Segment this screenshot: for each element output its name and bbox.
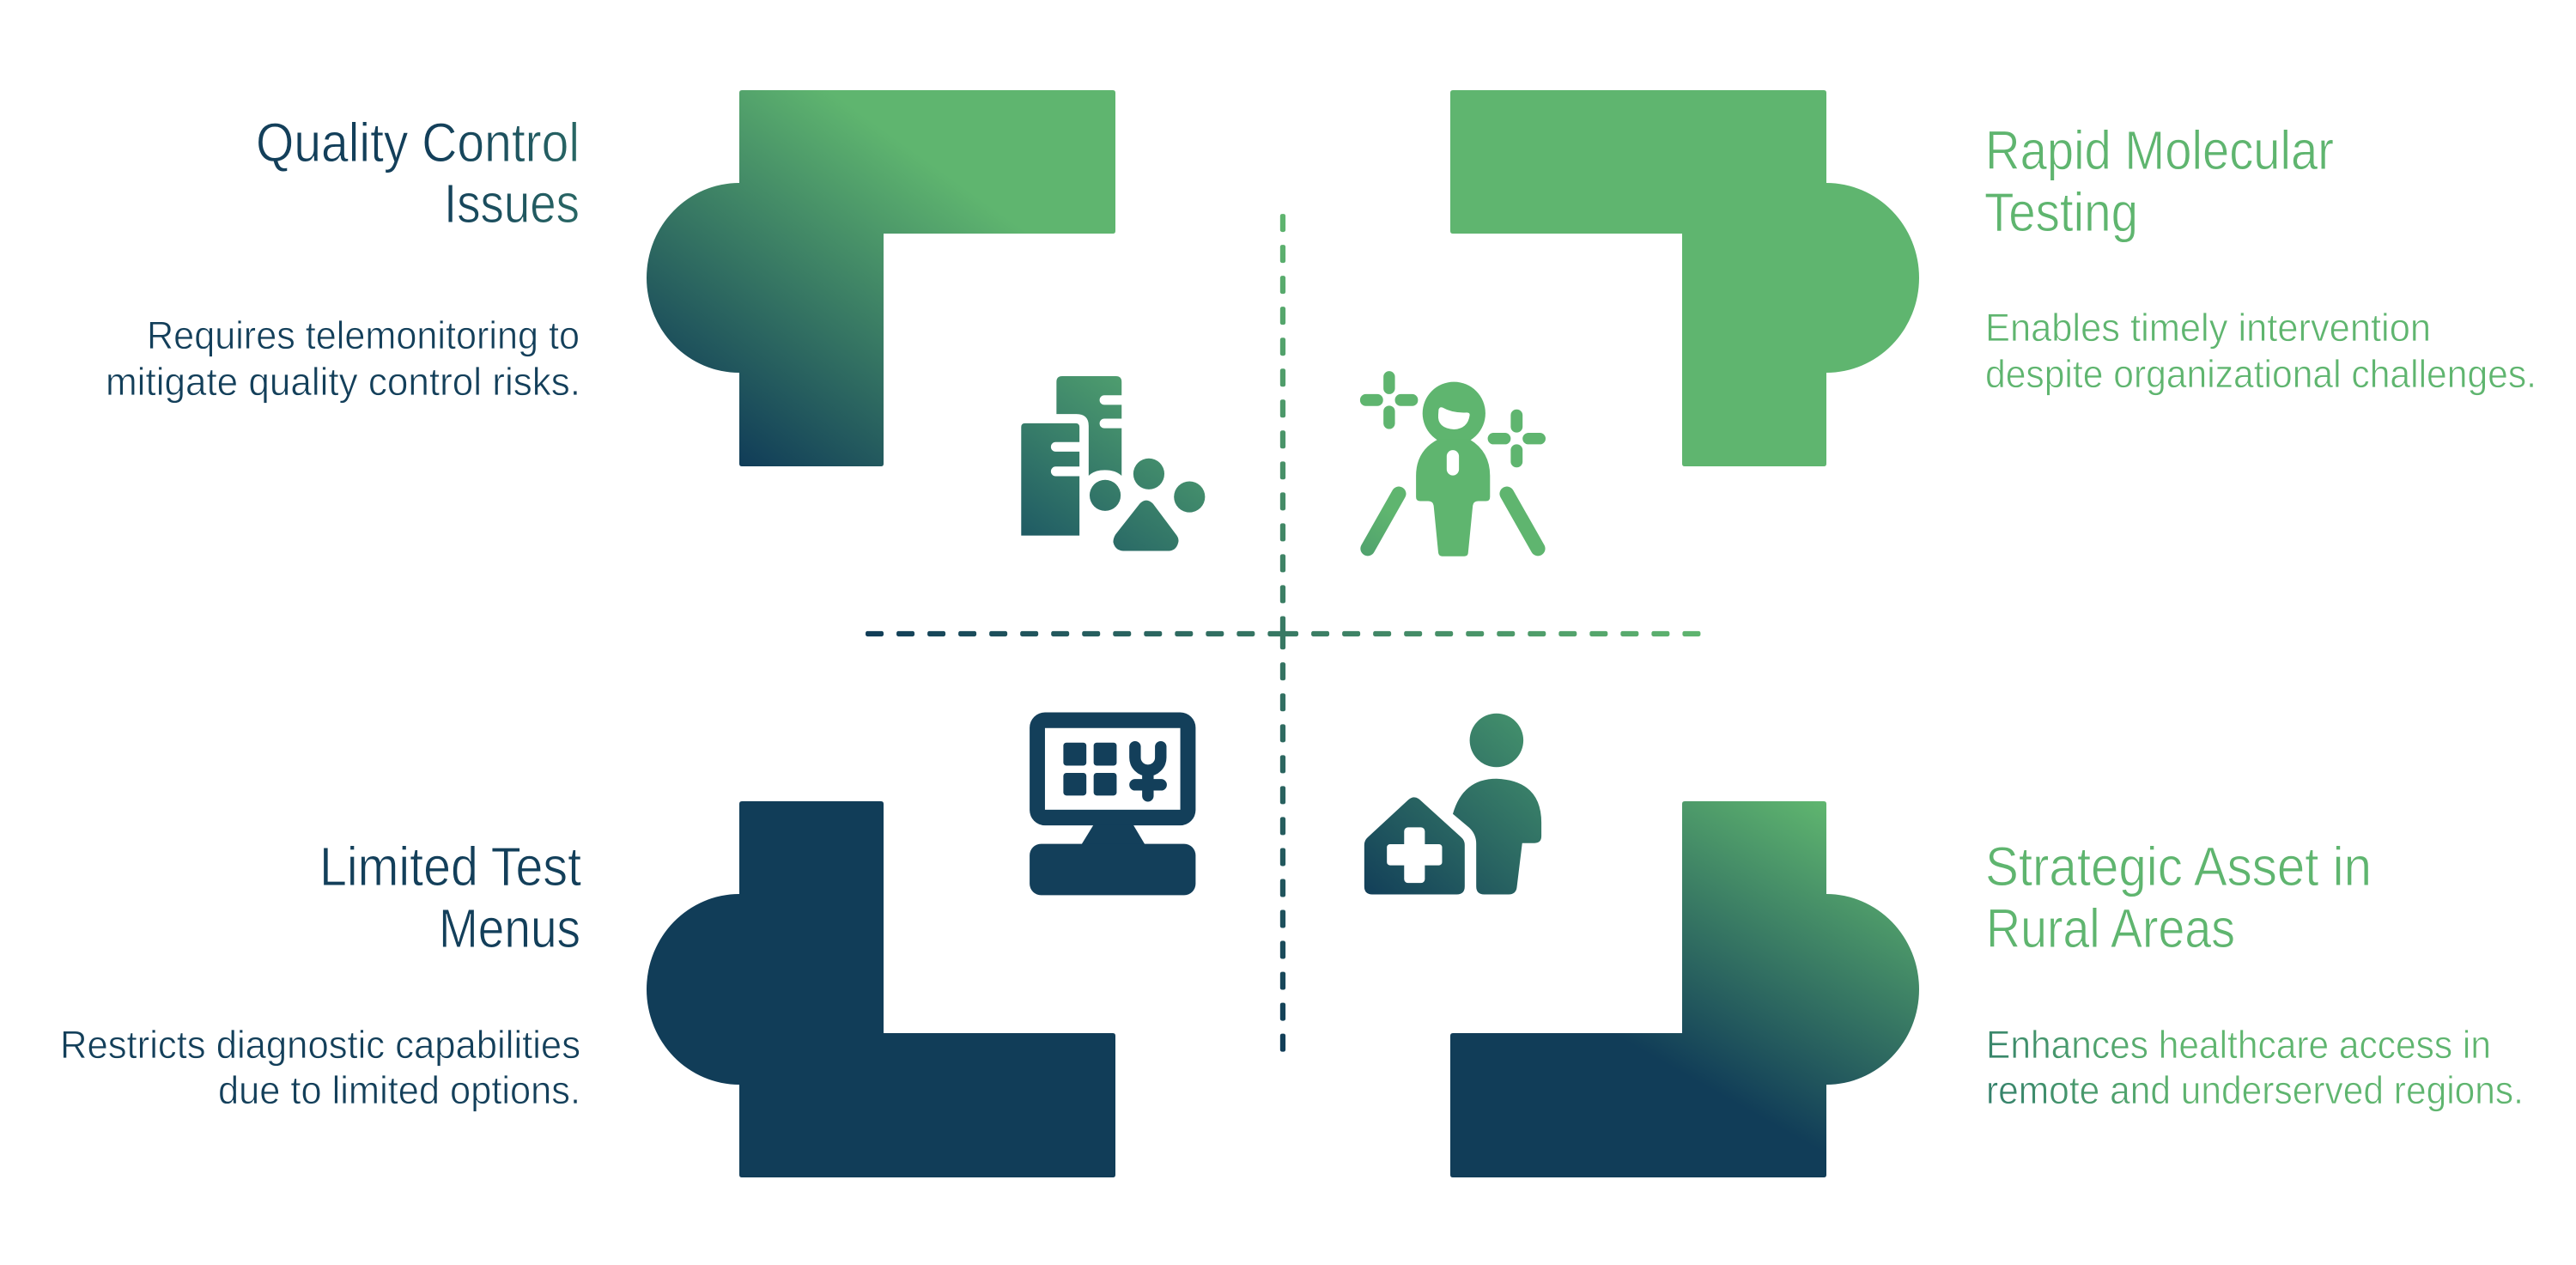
panel: strategic asset in rural areas — [1450, 801, 2524, 1177]
icon: buildings and paw — [1021, 376, 1205, 551]
panel: rapid molecular testing — [1450, 90, 2537, 466]
icon: smiling person with sparkles — [1360, 371, 1546, 556]
text: quality control description — [106, 313, 580, 404]
shape: bottom-left bracket — [647, 801, 1115, 1177]
text: limited test description: Restricts diagnostic capabilities — [60, 1023, 580, 1067]
text: strategic asset description: remote and underserved regions. — [1986, 1068, 2524, 1112]
text: rapid molecular description: despite organizational challenges. — [1985, 352, 2537, 396]
icon: computer terminal with grid and symbol — [1030, 712, 1195, 895]
shape: top-right bracket — [1450, 90, 1919, 466]
text: limited test description — [60, 1023, 580, 1112]
panel: limited test menus — [60, 801, 1115, 1177]
heading: quality control issues: Quality Control — [256, 112, 580, 173]
heading: limited test menus: Menus — [439, 897, 580, 959]
heading: quality control issues: Issues — [444, 173, 580, 234]
panel: quality control issues — [106, 90, 1115, 466]
heading: rapid molecular testing: Rapid Molecular — [1985, 119, 2334, 181]
text: quality control description: mitigate quality control risks. — [106, 360, 580, 404]
icon: person with medical house — [1364, 714, 1541, 895]
heading: limited test menus — [319, 836, 581, 959]
heading: quality control issues — [256, 112, 580, 234]
text: strategic asset description — [1986, 1023, 2524, 1112]
text: strategic asset description: Enhances healthcare access in — [1986, 1023, 2491, 1067]
text: quality control description: Requires telemonitoring to — [147, 313, 580, 357]
shape: top-left bracket — [647, 90, 1115, 466]
heading: rapid molecular testing — [1984, 119, 2334, 243]
heading: limited test menus: Limited Test — [319, 836, 581, 897]
text: rapid molecular description — [1985, 306, 2537, 396]
heading: strategic asset in rural areas — [1985, 836, 2372, 959]
heading: rapid molecular testing: Testing — [1984, 181, 2138, 243]
shape: bottom-right bracket — [1450, 801, 1919, 1177]
heading: strategic asset in rural areas: Rural Areas — [1986, 897, 2235, 959]
text: rapid molecular description: Enables timely intervention — [1985, 306, 2431, 350]
text: limited test description: due to limited options. — [218, 1068, 580, 1112]
heading: strategic asset in rural areas: Strategic Asset in — [1985, 836, 2372, 897]
